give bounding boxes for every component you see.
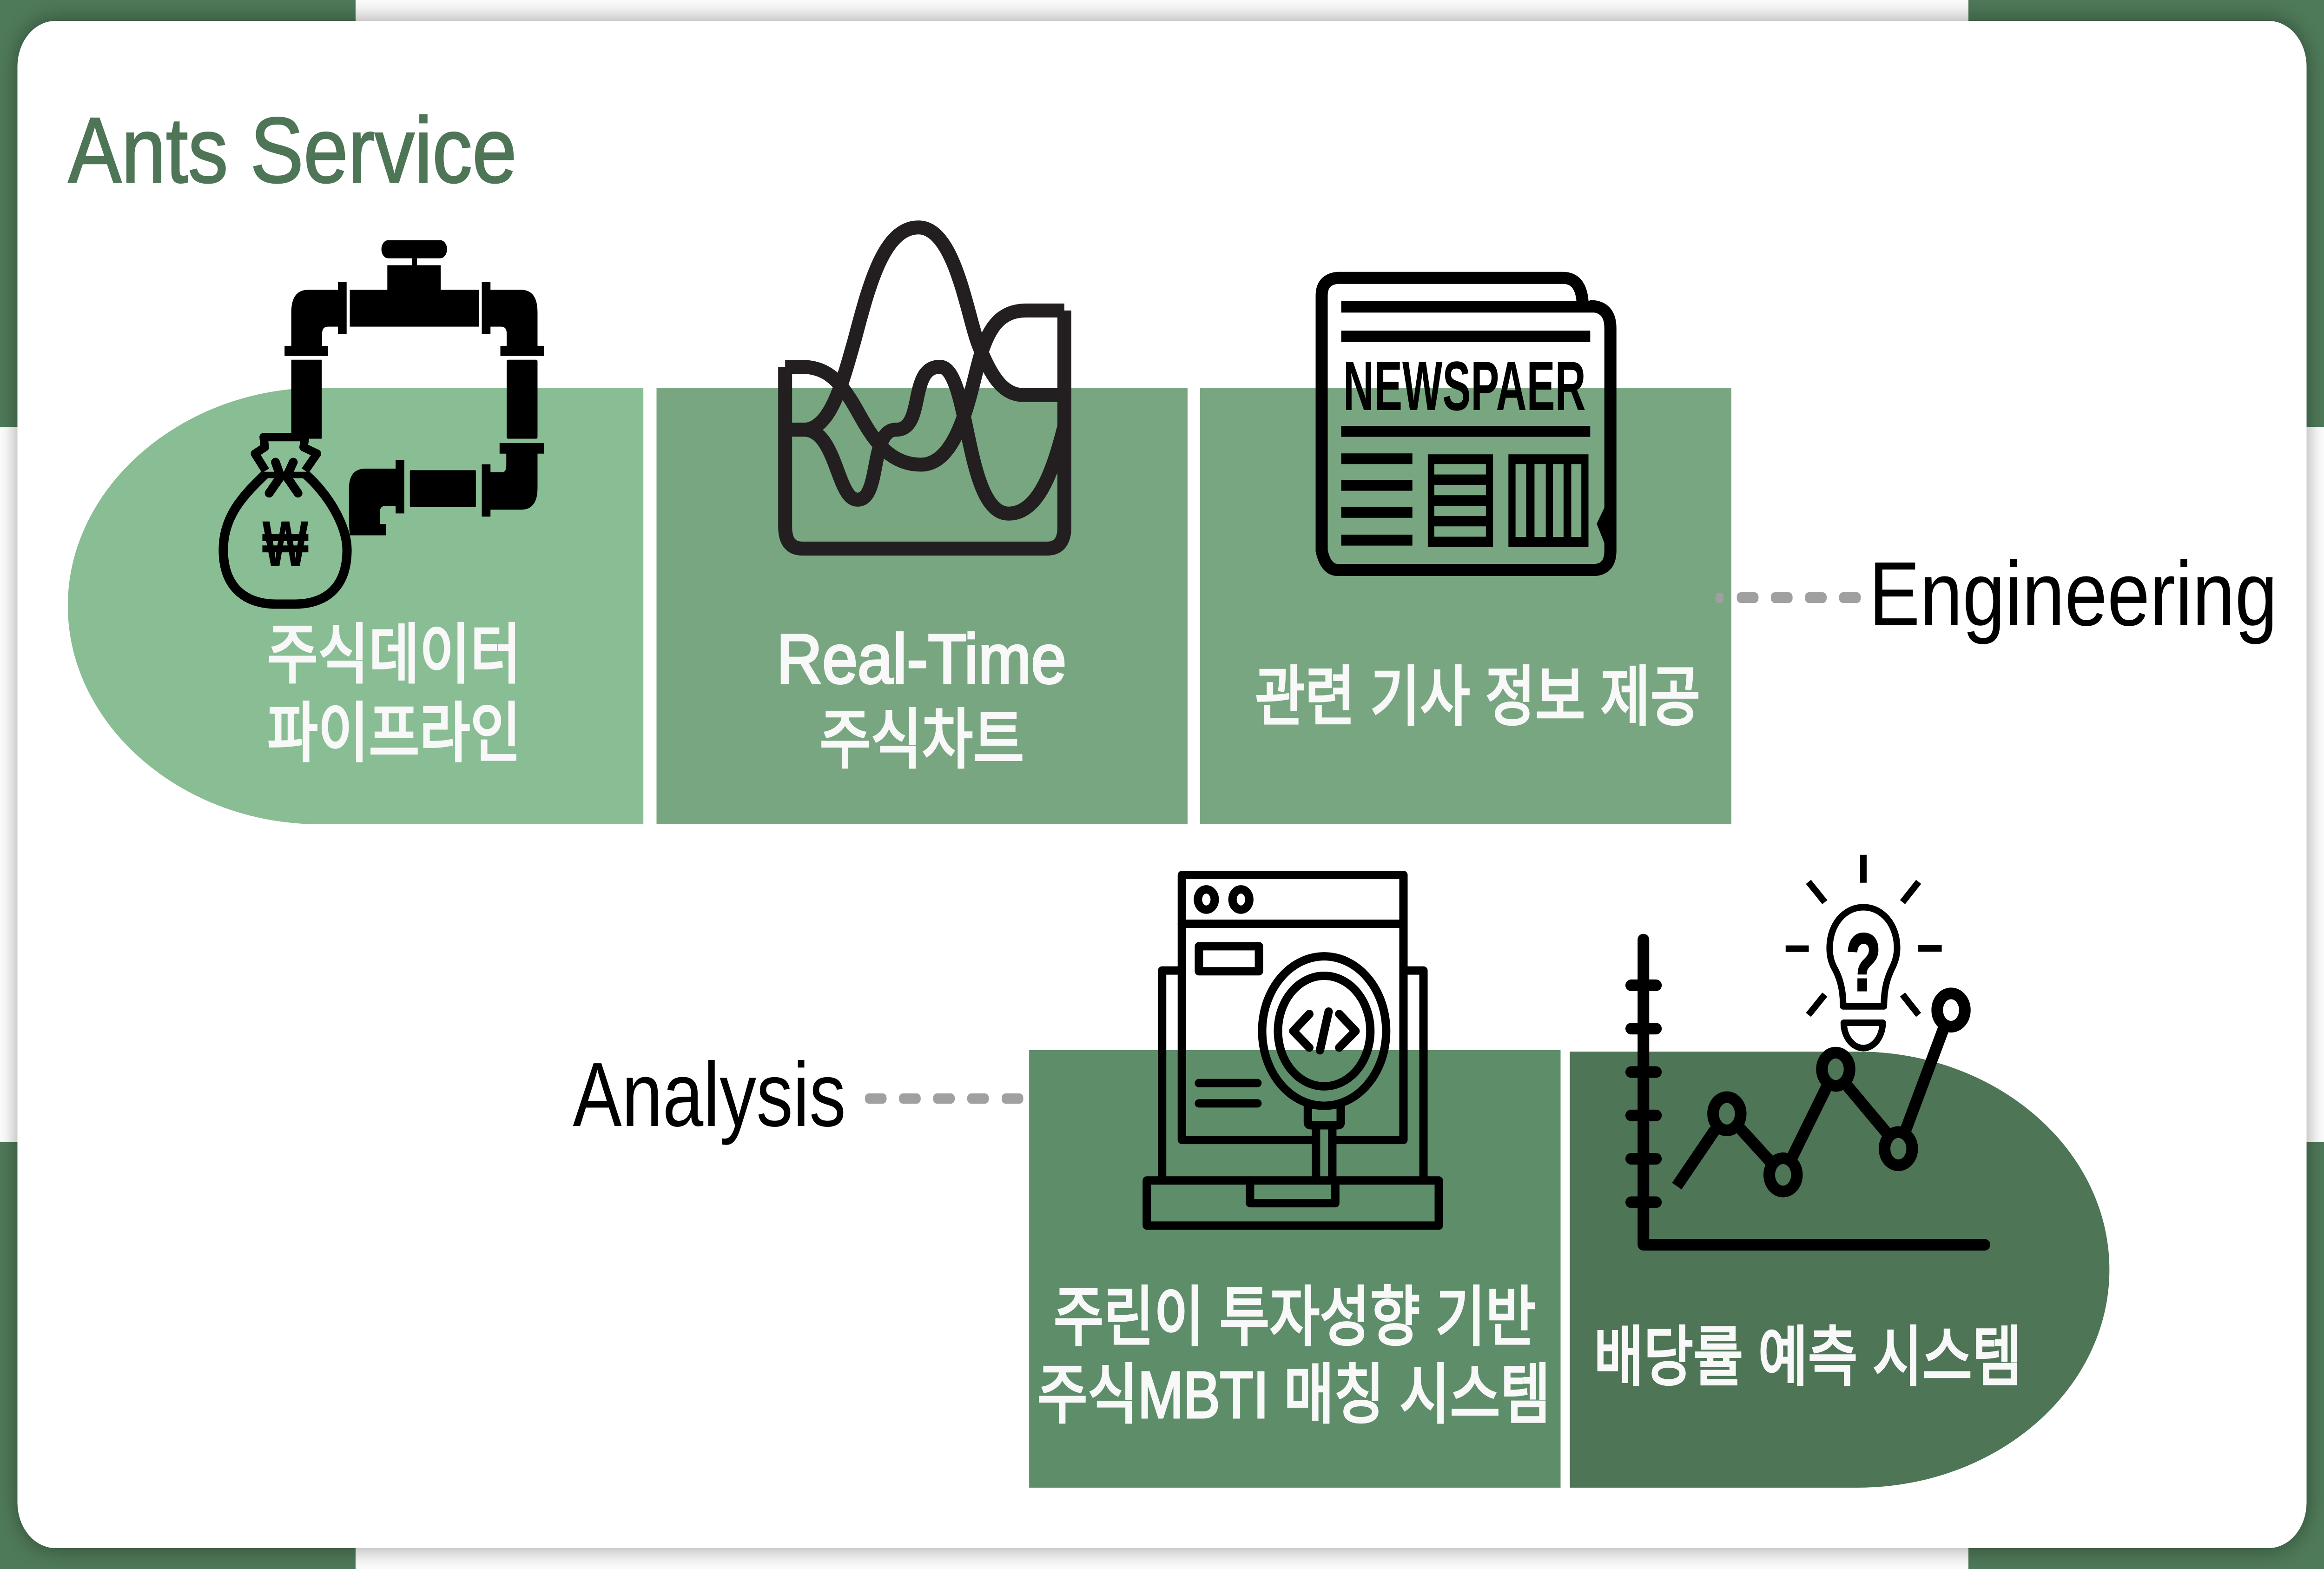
text: real-time stock chart: Real-Time bbox=[777, 620, 1066, 698]
text: related news info: 관련 기사 정보 제공 bbox=[1255, 661, 1700, 734]
title: Ants Service bbox=[68, 99, 517, 202]
icon: newspaper bbox=[1322, 278, 1611, 570]
text: stock data pipeline: 주식데이터 bbox=[267, 618, 521, 691]
panel: dividend prediction bbox=[1570, 1052, 2109, 1488]
panel: MBTI matching bbox=[1029, 1050, 1561, 1488]
icon: won symbol: ₩ bbox=[263, 508, 309, 581]
icon: pipeline and money bag bbox=[223, 240, 544, 604]
panel: stock data pipeline bbox=[68, 388, 643, 824]
icon: real-time wave chart bbox=[785, 227, 1064, 549]
text: real-time stock chart bbox=[777, 620, 1066, 776]
text: real-time stock chart: 주식차트 bbox=[819, 703, 1024, 776]
panel: real-time chart bbox=[656, 388, 1188, 824]
text: stock data pipeline: 파이프라인 bbox=[267, 697, 521, 770]
icon: line chart with light bulb bbox=[1631, 855, 1984, 1245]
icon: bulb question mark: ? bbox=[1846, 917, 1881, 1007]
connector: engineering bbox=[1716, 592, 1861, 603]
text: MBTI matching system: 주린이 투자성향 기반 bbox=[1054, 1281, 1536, 1354]
text: MBTI matching system: 주식MBTI 매칭 시스템 bbox=[1037, 1358, 1551, 1431]
newspaper masthead: NEWSPAER bbox=[1343, 347, 1586, 425]
text: stock data pipeline bbox=[267, 618, 521, 770]
icon: code inspection window bbox=[1147, 875, 1439, 1225]
text: MBTI matching system bbox=[1037, 1281, 1551, 1431]
panel: news articles bbox=[1200, 388, 1731, 824]
label: Analysis: Analysis bbox=[573, 1044, 846, 1145]
connector: analysis bbox=[865, 1093, 1023, 1104]
text: dividend prediction system: 배당률 예측 시스템 bbox=[1594, 1321, 2022, 1394]
label: Engineering: Engineering bbox=[1869, 543, 2278, 645]
